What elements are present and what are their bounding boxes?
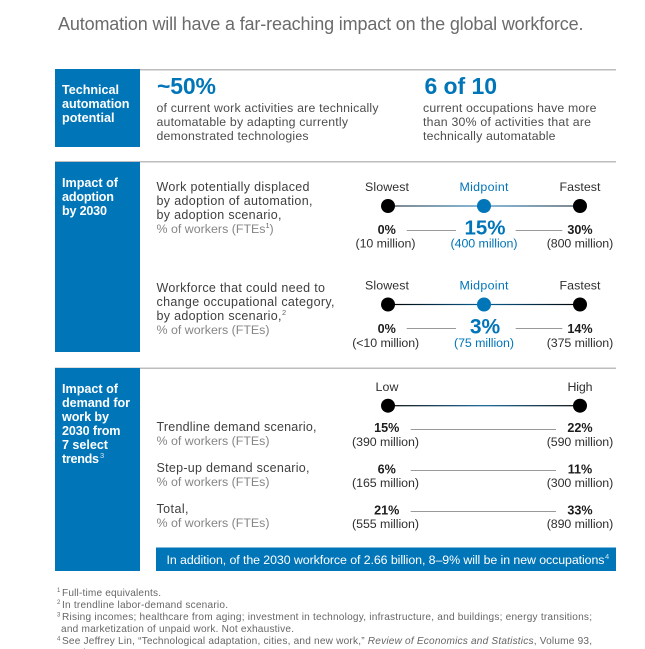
row labels: demand scenarios: Total, bbox=[156, 502, 188, 516]
callout banner: In addition, of the 2030 workforce of 2.66 billion, 8–9% will be in new occupations bbox=[166, 553, 604, 567]
scale: occupational change: Midpoint bbox=[460, 278, 509, 292]
row label: change occupational category: % of workers (FTEs) bbox=[156, 323, 270, 337]
stat: ~50% bbox=[156, 73, 379, 143]
panel heading: Impact of bbox=[62, 176, 119, 190]
stat: 6 of 10: than 30% of activities that are bbox=[423, 115, 591, 129]
footnotes: 4 bbox=[57, 636, 61, 642]
row labels: demand scenarios: Step-up demand scenario, bbox=[156, 461, 310, 475]
panel heading: adoption bbox=[62, 190, 114, 204]
stat: ~50%: automatable by adapting currently bbox=[156, 115, 349, 129]
row label: work potentially displaced bbox=[156, 180, 312, 236]
scale: occupational change: Slowest bbox=[365, 278, 410, 292]
panel: impact of adoption by 2030 bbox=[55, 161, 616, 352]
panel heading bbox=[55, 368, 140, 571]
scale: low to high: Low bbox=[376, 380, 399, 394]
scale: occupational change: (<10 million) bbox=[352, 336, 419, 350]
scale: occupational change: 0% bbox=[378, 322, 396, 336]
values: step-up demand: (300 million) bbox=[547, 476, 613, 490]
footnotes: Rising incomes; healthcare from aging; investment in technology, infrastructure, and buildings; energy transitions; bbox=[62, 612, 592, 623]
row label: work potentially displaced: 1 bbox=[266, 221, 270, 230]
values: total: 21% bbox=[374, 504, 399, 518]
footnotes: In trendline labor-demand scenario. bbox=[62, 600, 228, 611]
stat: ~50%: ~50% bbox=[157, 73, 216, 99]
panel heading: demand for bbox=[62, 396, 130, 410]
row label: work potentially displaced: by adoption scenario, bbox=[156, 208, 282, 222]
panel heading: work by bbox=[61, 410, 109, 424]
values: trendline demand bbox=[352, 421, 613, 449]
scale: low to high: High bbox=[568, 380, 593, 394]
values: total: (890 million) bbox=[547, 517, 613, 531]
scale: displaced work: Fastest bbox=[560, 180, 601, 194]
scale: occupational change: Fastest bbox=[560, 278, 601, 292]
row label: work potentially displaced: ) bbox=[270, 222, 274, 236]
row label: change occupational category: 2 bbox=[282, 308, 286, 317]
values: step-up demand: 6% bbox=[378, 462, 396, 476]
panel heading: Technical bbox=[62, 83, 119, 97]
scale: displaced work: Midpoint bbox=[460, 180, 509, 194]
values: trendline demand: (590 million) bbox=[547, 435, 613, 449]
panel: impact of demand for work by 2030 bbox=[55, 368, 616, 571]
values: step-up demand: 11% bbox=[568, 462, 592, 476]
scale: low to high bbox=[376, 380, 593, 413]
values: trendline demand: (390 million) bbox=[352, 435, 419, 449]
scale: displaced work: (800 million) bbox=[547, 236, 613, 250]
values: total bbox=[352, 504, 613, 531]
panel heading bbox=[55, 69, 140, 147]
stat: 6 of 10: current occupations have more bbox=[423, 101, 597, 115]
footnotes: See Jeffrey Lin, “Technological adaptation, cities, and new work,” Review of Economics and Statistics, Volume 93, bbox=[62, 636, 592, 647]
scale: displaced work: 15% bbox=[464, 216, 506, 240]
row label: change occupational category: by adoption scenario, bbox=[156, 309, 282, 323]
row label: work potentially displaced: Work potentially displaced bbox=[156, 180, 310, 194]
values: trendline demand: 15% bbox=[374, 421, 399, 435]
row label: change occupational category: change occupational category, bbox=[156, 295, 334, 309]
row label: change occupational category bbox=[156, 281, 334, 337]
values: total: 33% bbox=[567, 504, 593, 518]
values: step-up demand bbox=[352, 462, 613, 490]
footnotes: 3 bbox=[57, 612, 61, 618]
scale: occupational change bbox=[352, 278, 613, 350]
values: total: (555 million) bbox=[352, 517, 419, 531]
row labels: demand scenarios: Trendline demand scenario, bbox=[156, 420, 316, 434]
scale: displaced work bbox=[356, 180, 613, 250]
values: trendline demand: 22% bbox=[567, 421, 593, 435]
panel heading: 7 select bbox=[62, 438, 109, 452]
panel heading: trends bbox=[62, 452, 99, 466]
panel heading: Impact of bbox=[62, 382, 119, 396]
stat: 6 of 10: technically automatable bbox=[423, 129, 556, 143]
scale: displaced work: 30% bbox=[567, 223, 593, 237]
footnotes: 1 bbox=[57, 588, 61, 594]
scale: occupational change: (375 million) bbox=[547, 336, 613, 350]
row labels: demand scenarios bbox=[156, 420, 316, 530]
panel: technical automation potential bbox=[55, 69, 616, 147]
footnotes: and marketization of unpaid work. Not exhaustive. bbox=[61, 624, 294, 635]
panel heading: automation bbox=[62, 97, 130, 111]
row labels: demand scenarios: % of workers (FTEs) bbox=[156, 434, 270, 448]
stat: ~50%: demonstrated technologies bbox=[156, 129, 308, 143]
row label: change occupational category: Workforce that could need to bbox=[156, 281, 325, 295]
footnotes: 2 bbox=[57, 600, 61, 606]
panel heading: 2030 from bbox=[62, 424, 120, 438]
scale: displaced work: (10 million) bbox=[356, 236, 416, 250]
scale: occupational change: 3% bbox=[470, 316, 500, 338]
scale: displaced work: Slowest bbox=[365, 180, 410, 194]
title: Automation will have a far-reaching impact on the global workforce. bbox=[58, 14, 584, 34]
scale: displaced work: (400 million) bbox=[450, 236, 518, 250]
stat: 6 of 10 bbox=[423, 73, 597, 143]
scale: occupational change: (75 million) bbox=[454, 336, 514, 350]
stat: 6 of 10: 6 of 10 bbox=[424, 73, 497, 99]
callout banner: 4 bbox=[605, 552, 609, 561]
values: step-up demand: (165 million) bbox=[352, 476, 419, 490]
panel heading: potential bbox=[62, 111, 114, 125]
row labels: demand scenarios: % of workers (FTEs) bbox=[156, 475, 270, 489]
panel heading: 3 bbox=[100, 451, 104, 460]
scale: displaced work: 0% bbox=[378, 223, 396, 237]
callout banner bbox=[156, 548, 616, 571]
panel heading: by 2030 bbox=[62, 204, 107, 218]
row label: work potentially displaced: by adoption of automation, bbox=[156, 194, 312, 208]
footnotes bbox=[57, 588, 592, 649]
footnotes: Full-time equivalents. bbox=[62, 588, 161, 599]
row labels: demand scenarios: % of workers (FTEs) bbox=[156, 516, 270, 530]
stat: ~50%: of current work activities are technically bbox=[156, 101, 379, 115]
row label: work potentially displaced: % of workers (FTEs bbox=[156, 222, 266, 236]
panel heading bbox=[55, 162, 140, 352]
scale: occupational change: 14% bbox=[567, 322, 593, 336]
